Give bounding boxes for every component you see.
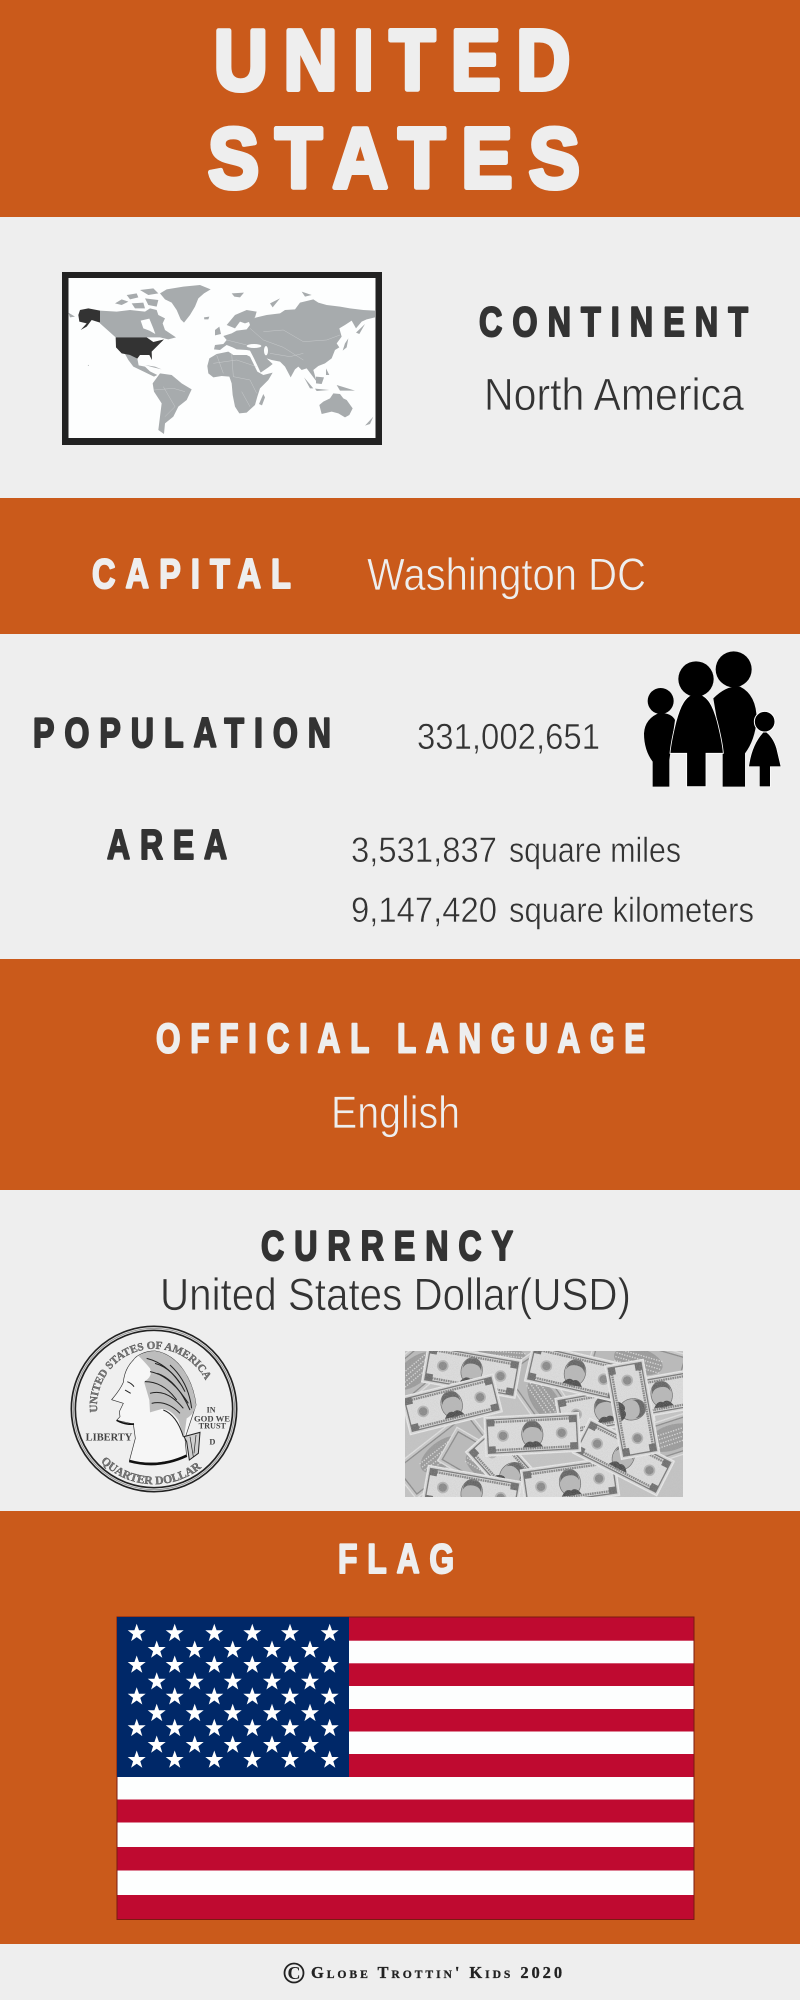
icon: quarter coin: TRUST bbox=[199, 1422, 226, 1431]
coin portrait bbox=[112, 1351, 200, 1464]
title: STATES bbox=[208, 112, 596, 206]
panel: population and area bbox=[0, 634, 800, 959]
icon: quarter coin: QUARTER DOLLAR bbox=[102, 1458, 202, 1484]
image: dollar bills bbox=[405, 1351, 683, 1497]
icon: quarter coin: D bbox=[209, 1437, 215, 1446]
footer bbox=[0, 1944, 800, 2000]
value: square miles: 3,531,837 bbox=[351, 831, 497, 870]
icon: family silhouette bbox=[644, 651, 781, 787]
panel: official language bbox=[0, 959, 800, 1190]
flag of the United States bbox=[117, 1617, 694, 1920]
value: United States Dollar: United States Dollar(USD) bbox=[160, 1269, 631, 1320]
value: square miles bbox=[351, 831, 681, 870]
value: English: English bbox=[331, 1087, 460, 1138]
icon: quarter coin bbox=[70, 1326, 238, 1492]
panel: flag bbox=[0, 1511, 800, 1944]
title bbox=[208, 14, 596, 206]
value: population number: 331,002,651 bbox=[417, 716, 600, 757]
panel: continent bbox=[0, 217, 800, 498]
credit line: Globe Trottin' Kids 2020 bbox=[311, 1963, 565, 1982]
heading: population: POPULATION bbox=[33, 709, 341, 756]
world map with United States highlighted bbox=[62, 272, 382, 445]
heading: capital: CAPITAL bbox=[92, 550, 301, 597]
icon: quarter coin: LIBERTY bbox=[86, 1431, 132, 1443]
panel: capital bbox=[0, 498, 800, 634]
value: square kilometers bbox=[351, 891, 754, 930]
icon: copyright: C bbox=[288, 1963, 300, 1983]
value: North America: North America bbox=[484, 369, 745, 420]
heading: currency: CURRENCY bbox=[261, 1222, 523, 1269]
title: UNITED bbox=[214, 14, 586, 108]
panel: title banner bbox=[0, 0, 800, 217]
icon: quarter coin: UNITED STATES OF AMERICA bbox=[90, 1342, 210, 1412]
value: square miles: square miles bbox=[509, 831, 681, 870]
value: square kilometers: square kilometers bbox=[509, 891, 754, 930]
canton with stars bbox=[117, 1617, 349, 1777]
heading: flag: FLAG bbox=[338, 1535, 464, 1582]
value: square kilometers: 9,147,420 bbox=[351, 891, 497, 930]
value: Washington DC: Washington DC bbox=[367, 549, 646, 600]
icon: quarter coin: IN bbox=[207, 1406, 216, 1415]
heading: area: AREA bbox=[107, 821, 237, 868]
icon: quarter coin: GOD WE bbox=[194, 1414, 230, 1423]
panel: currency bbox=[70, 1222, 683, 1497]
icon: copyright bbox=[284, 1963, 304, 1983]
